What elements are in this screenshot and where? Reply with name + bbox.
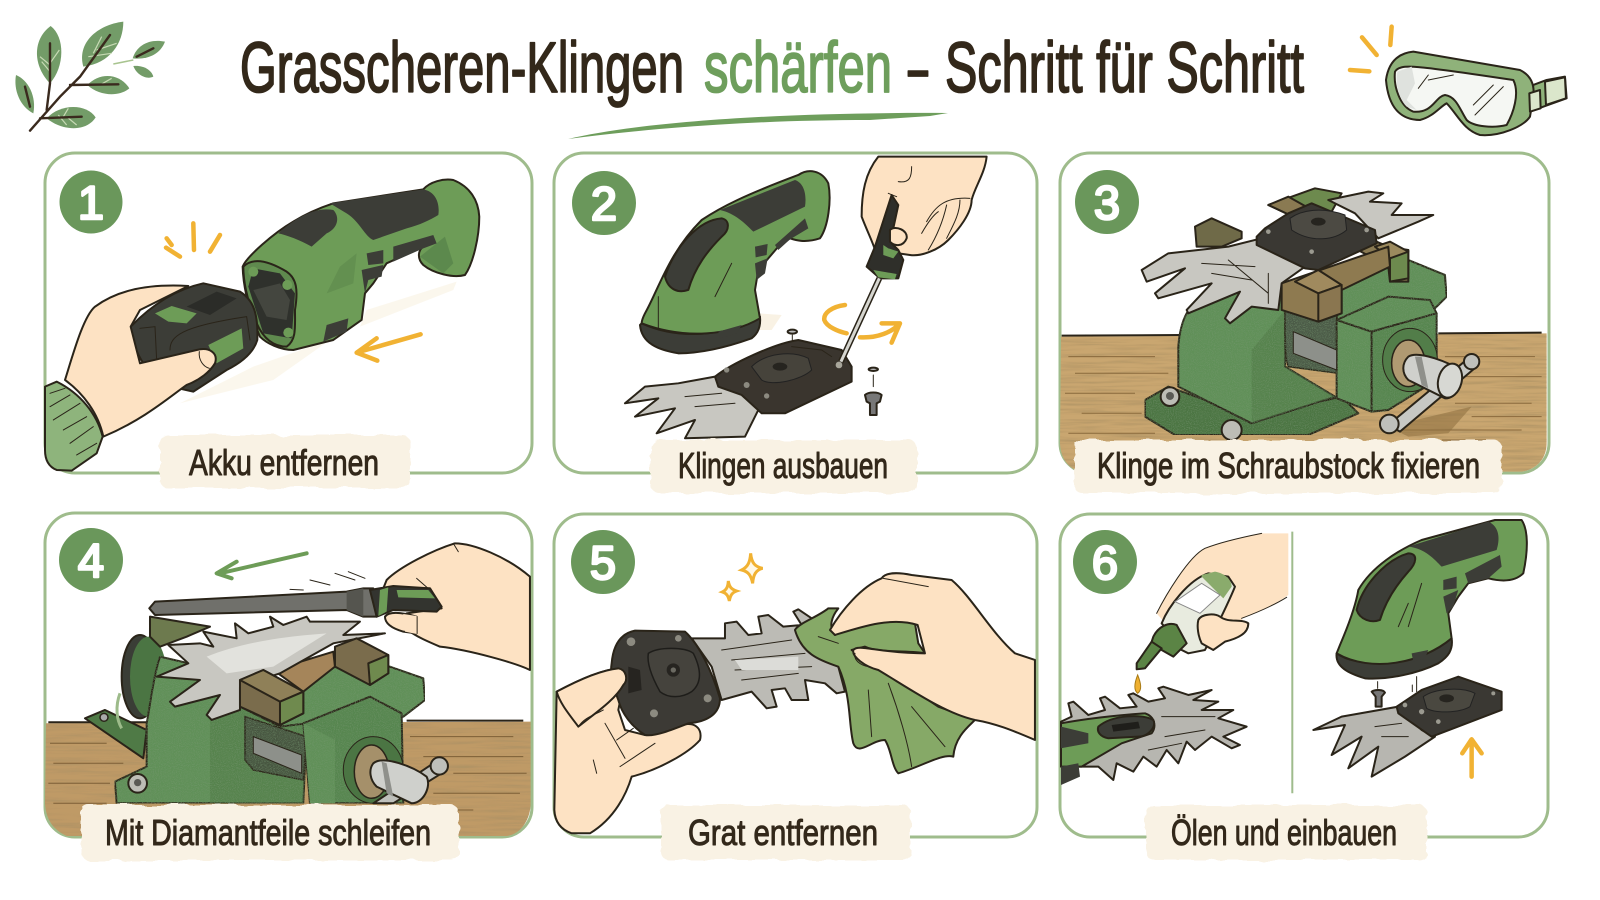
badge: 6: 6 xyxy=(1092,536,1118,589)
title: Schritt für Schritt xyxy=(945,29,1304,108)
badge: 5 xyxy=(571,530,635,594)
title: Grasscheren-Klingen xyxy=(240,29,684,108)
label: Klingen ausbauen xyxy=(651,440,917,493)
illustration: wiping burr with cloth xyxy=(554,553,1035,833)
label: Mit Diamantfeile schleifen: Mit Diamantfeile schleifen xyxy=(105,812,431,853)
decoration: leafy branch xyxy=(15,22,165,131)
title: schärfen xyxy=(704,29,892,108)
illustration: oiling and reassembly xyxy=(1061,520,1527,793)
label: Mit Diamantfeile schleifen xyxy=(81,805,459,860)
badge: 6 xyxy=(1073,530,1137,594)
panel 4: Mit Diamantfeile schleifen xyxy=(45,513,532,860)
title xyxy=(240,29,1304,108)
label: Ölen und einbauen xyxy=(1146,805,1427,860)
label: Klinge im Schraubstock fixieren: Klinge im Schraubstock fixieren xyxy=(1097,445,1480,486)
badge: 3 xyxy=(1075,170,1139,234)
panel 1: Akku entfernen xyxy=(45,153,532,488)
title underline stroke xyxy=(568,113,948,139)
illustration: blade clamped in vise xyxy=(1060,188,1547,472)
icon: safety goggles xyxy=(1350,27,1567,135)
title: – xyxy=(908,29,928,108)
label: Grat entfernen xyxy=(661,805,911,860)
illustration: removing blades xyxy=(625,157,987,438)
badge: 2 xyxy=(572,171,636,235)
label: Akku entfernen: Akku entfernen xyxy=(189,442,379,483)
illustration: removing battery xyxy=(45,180,479,471)
badge: 3: 3 xyxy=(1094,176,1120,229)
label: Klingen ausbauen: Klingen ausbauen xyxy=(678,445,888,486)
illustration: filing blade in vise xyxy=(45,543,531,836)
badge: 1 xyxy=(60,170,122,234)
badge: 4: 4 xyxy=(78,534,104,587)
badge: 5: 5 xyxy=(590,536,616,589)
badge: 1: 1 xyxy=(78,176,104,229)
panel 3: Klinge im Schraubstock fixieren xyxy=(1060,153,1549,493)
label: Ölen und einbauen: Ölen und einbauen xyxy=(1171,812,1397,853)
panel 5: Grat entfernen xyxy=(554,514,1037,860)
label: Akku entfernen xyxy=(160,435,410,488)
label: Klinge im Schraubstock fixieren xyxy=(1074,440,1502,493)
badge: 4 xyxy=(59,528,123,592)
panel 2: Klingen ausbauen xyxy=(554,153,1037,493)
panel 6: Ölen und einbauen xyxy=(1060,514,1548,860)
label: Grat entfernen: Grat entfernen xyxy=(688,812,878,853)
badge: 2: 2 xyxy=(591,177,617,230)
